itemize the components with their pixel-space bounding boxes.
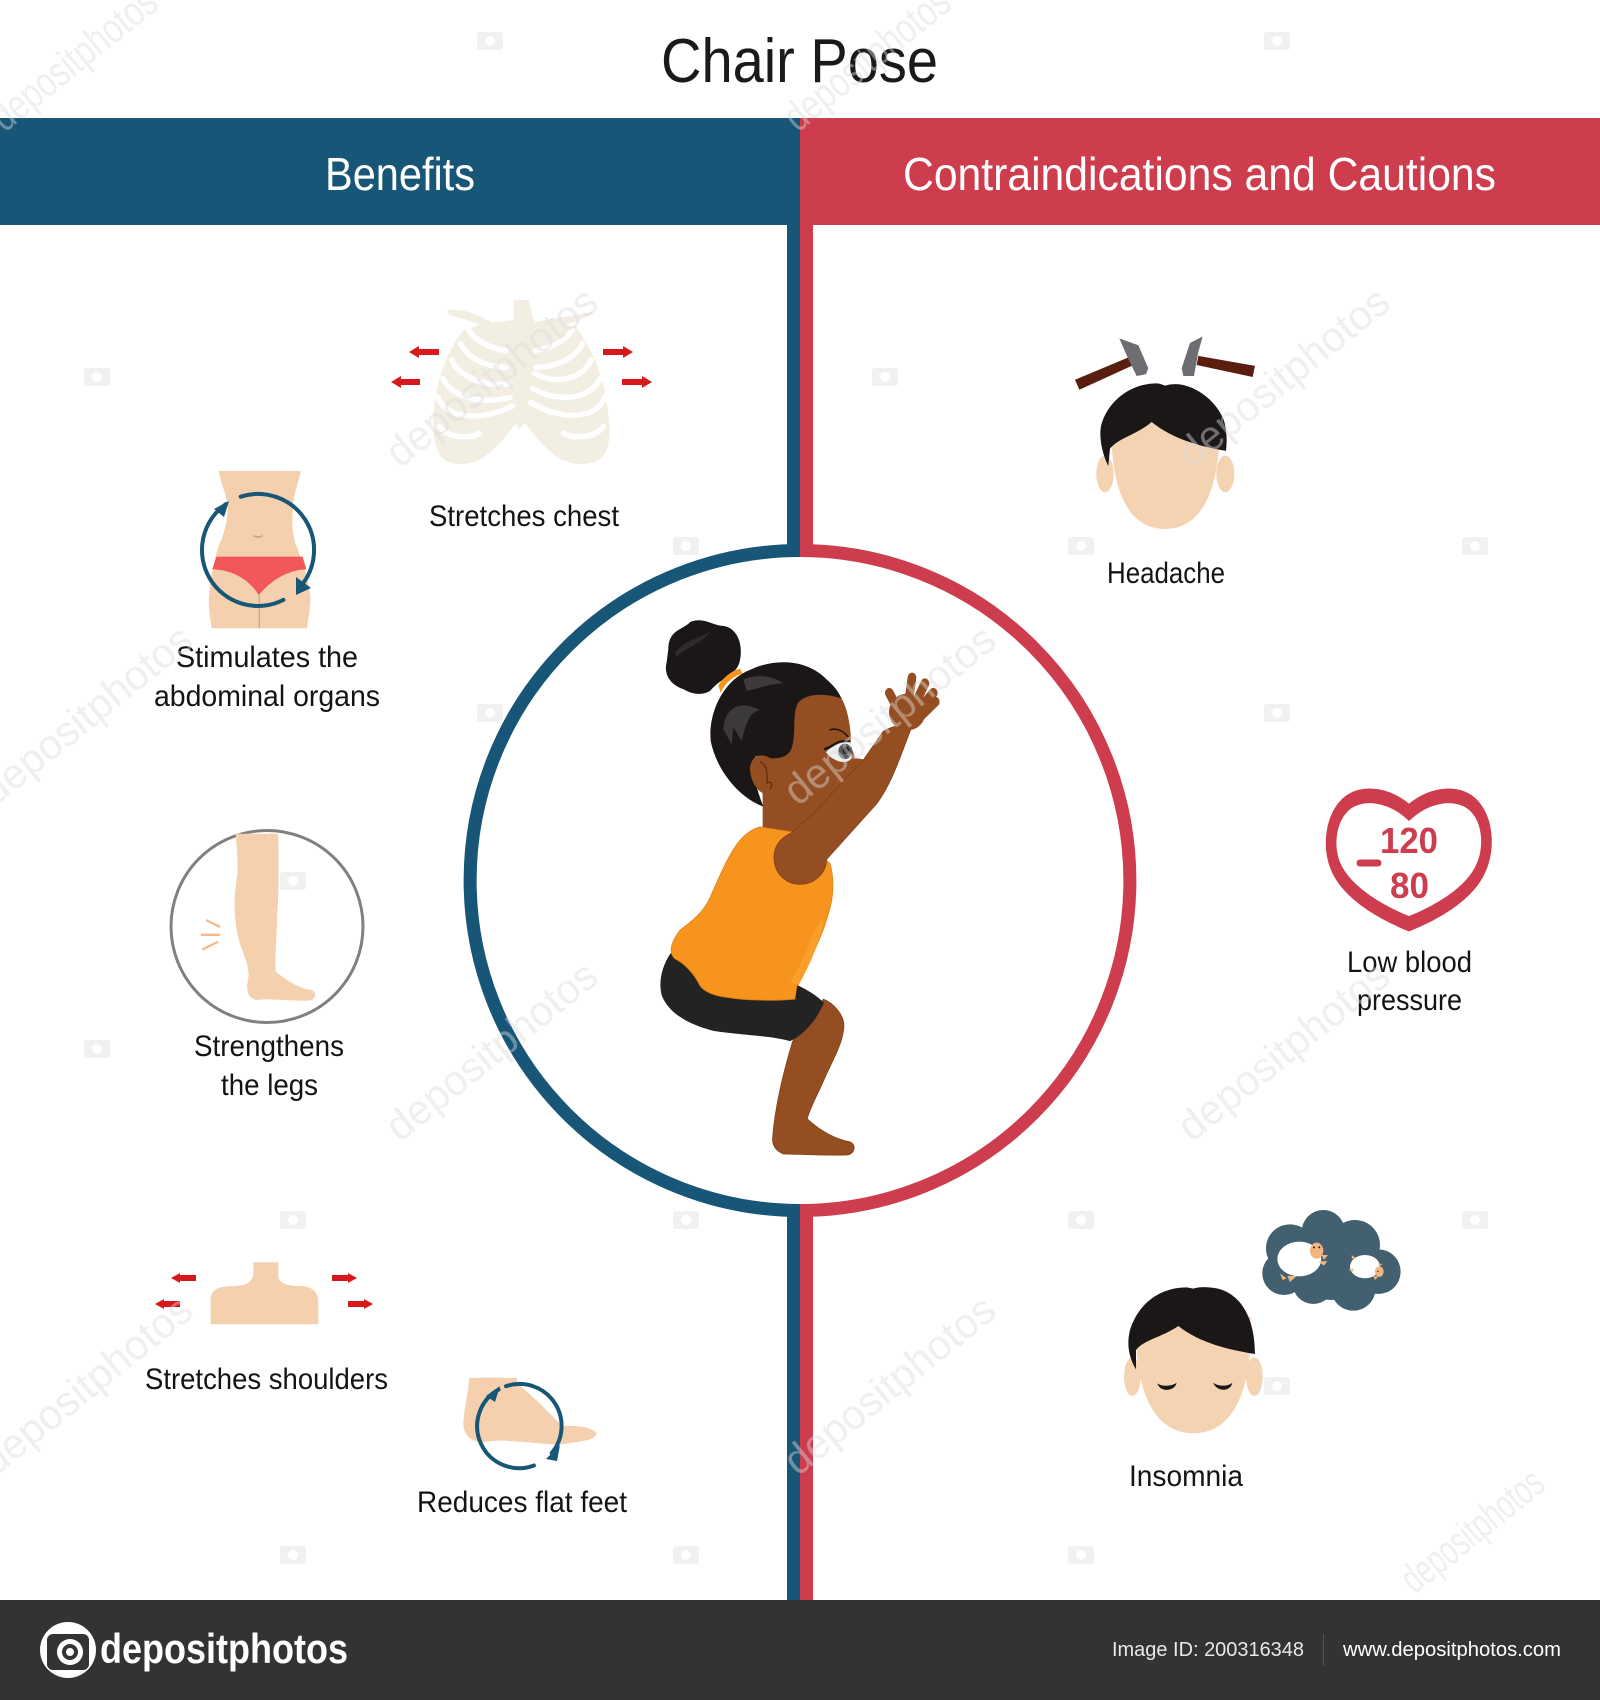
icon: shoulders (211, 1262, 318, 1324)
figure: child in chair pose (660, 620, 935, 1155)
panel: contraindications header: Contraindications and Cautions (903, 148, 1496, 200)
label: Insomnia (1129, 1460, 1243, 1493)
label: pressure (1357, 984, 1462, 1017)
label (154, 641, 380, 713)
icon: cloud with sheep (1262, 1210, 1401, 1311)
icon: abdomen (209, 471, 310, 628)
watermark layer: depositphotos (376, 951, 606, 1150)
watermark layer: depositphotos (1168, 951, 1398, 1150)
panel: contraindications header (800, 118, 1600, 225)
label: the legs (221, 1069, 318, 1102)
label: Reduces flat feet (417, 1486, 628, 1519)
benefit: strengthens the legs (171, 830, 363, 1102)
label: Stretches chest (429, 500, 620, 533)
icon: heart with reading: 120 (1380, 820, 1438, 861)
website: www.depositphotos.com (1342, 1639, 1561, 1661)
benefit: stretches chest (391, 300, 652, 533)
watermark camera marks (84, 32, 1488, 1564)
label: Strengthens (194, 1030, 344, 1063)
label: Low blood (1347, 946, 1472, 979)
watermark layer: depositphotos (1168, 277, 1398, 476)
benefit: reduces flat feet (417, 1378, 628, 1519)
arrows: circular around foot (477, 1384, 562, 1468)
logo: wordmark: depositphotos (100, 1625, 348, 1672)
label (194, 1030, 344, 1102)
icon: ribcage (433, 300, 609, 464)
label (1347, 946, 1472, 1017)
label: Stretches shoulders (145, 1363, 388, 1396)
watermark layer: depositphotos (376, 277, 606, 476)
caution: headache (1075, 337, 1255, 590)
panel: benefits header: Benefits (325, 148, 475, 200)
arrows: shoulder stretch (155, 1273, 373, 1309)
icon: heart with reading (1331, 796, 1486, 924)
arrows: chest stretch (391, 346, 652, 388)
watermark layer: depositphotos (774, 615, 1004, 814)
watermark layer: depositphotos (774, 1285, 1004, 1484)
benefit: stretches shoulders (145, 1262, 388, 1396)
logo: camera mark (40, 1622, 96, 1678)
label: abdominal organs (154, 680, 380, 713)
caution: low blood pressure (1331, 796, 1486, 1017)
label: Headache (1107, 557, 1225, 590)
image id: Image ID: 200316348 (1112, 1639, 1304, 1661)
title: Chair Pose (661, 27, 938, 96)
caution: insomnia (1124, 1210, 1401, 1493)
icon: sleeping head (1124, 1287, 1263, 1433)
arrows: circular around abdomen (202, 494, 314, 606)
footer bar (0, 1600, 1600, 1700)
icon: head with hammers (1075, 337, 1255, 529)
benefit: stimulates the abdominal organs (154, 471, 380, 713)
icon: leg in circle (171, 830, 363, 1022)
panel: benefits header (0, 118, 800, 225)
label: Stimulates the (176, 641, 358, 674)
icon: heart with reading: 80 (1390, 865, 1429, 906)
icon: foot (463, 1378, 597, 1445)
center circle ring (470, 550, 1130, 1210)
center divider bars (787, 225, 813, 1600)
